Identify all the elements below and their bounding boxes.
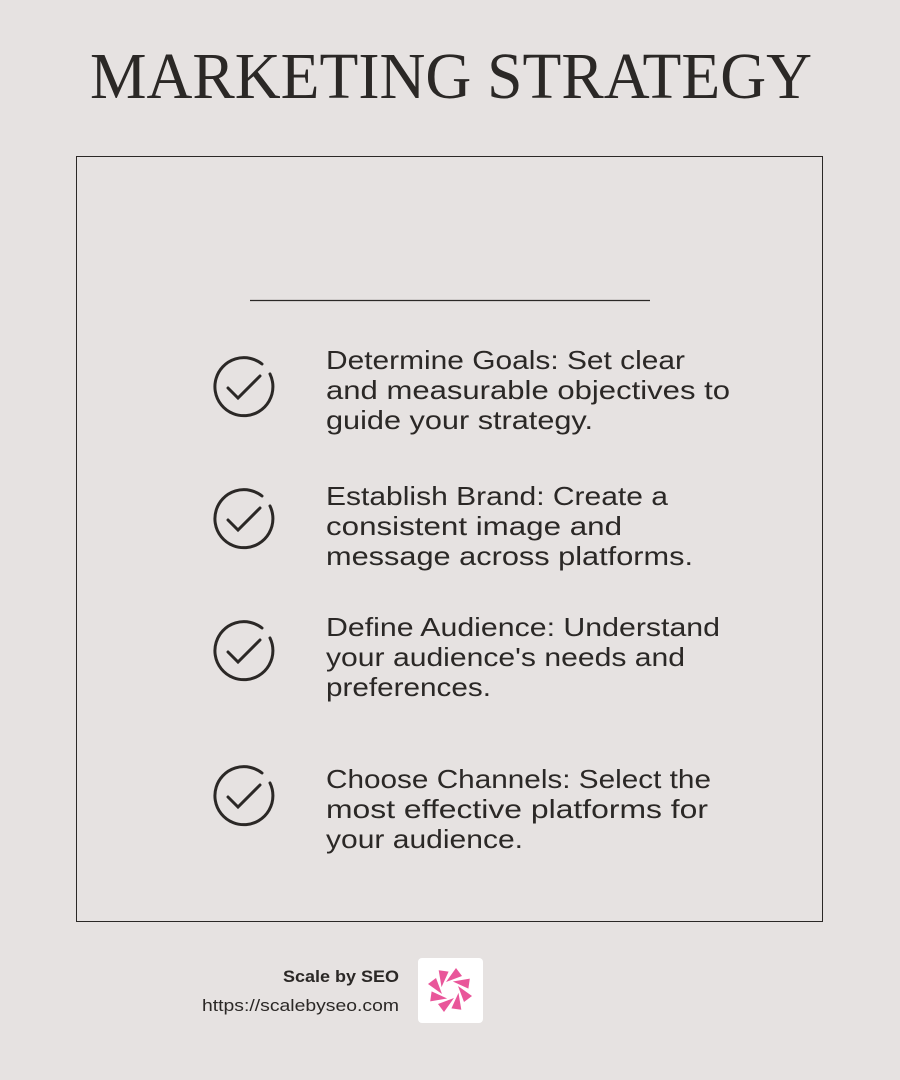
icon: logo xyxy=(418,958,483,1023)
icon: check circle 2 xyxy=(215,490,273,548)
text: determine goals xyxy=(326,345,730,435)
icon: check circle 3 xyxy=(215,622,273,680)
text: choose channels: most effective platforms for xyxy=(326,794,708,824)
text: choose channels: your audience. xyxy=(326,824,523,854)
item 2 xyxy=(215,481,693,571)
panel: main frame xyxy=(76,156,822,922)
text: define audience: preferences. xyxy=(326,672,491,702)
footer brand text xyxy=(202,967,399,1015)
text: define audience: Define Audience: Understand xyxy=(326,612,720,642)
text: determine goals: guide your strategy. xyxy=(326,405,593,435)
text: determine goals: Determine Goals: Set clear xyxy=(326,345,685,375)
text: establish brand xyxy=(326,481,693,571)
text: determine goals: and measurable objectives to xyxy=(326,375,730,405)
item 1 xyxy=(215,345,730,435)
footer brand text: Scale by SEO xyxy=(283,967,399,986)
icon: check circle 1 xyxy=(215,358,273,416)
footer brand text: https://scalebyseo.com xyxy=(202,996,399,1015)
text: establish brand: Establish Brand: Create a xyxy=(326,481,669,511)
icon: check circle 4 xyxy=(215,767,273,825)
title: MARKETING STRATEGY xyxy=(90,40,812,113)
text: establish brand: message across platforms. xyxy=(326,541,693,571)
text: define audience: your audience's needs and xyxy=(326,642,685,672)
text: define audience xyxy=(326,612,720,702)
text: choose channels xyxy=(326,764,711,854)
text: establish brand: consistent image and xyxy=(326,511,622,541)
item 4 xyxy=(215,764,711,854)
text: choose channels: Choose Channels: Select the xyxy=(326,764,711,794)
item 3 xyxy=(215,612,720,702)
